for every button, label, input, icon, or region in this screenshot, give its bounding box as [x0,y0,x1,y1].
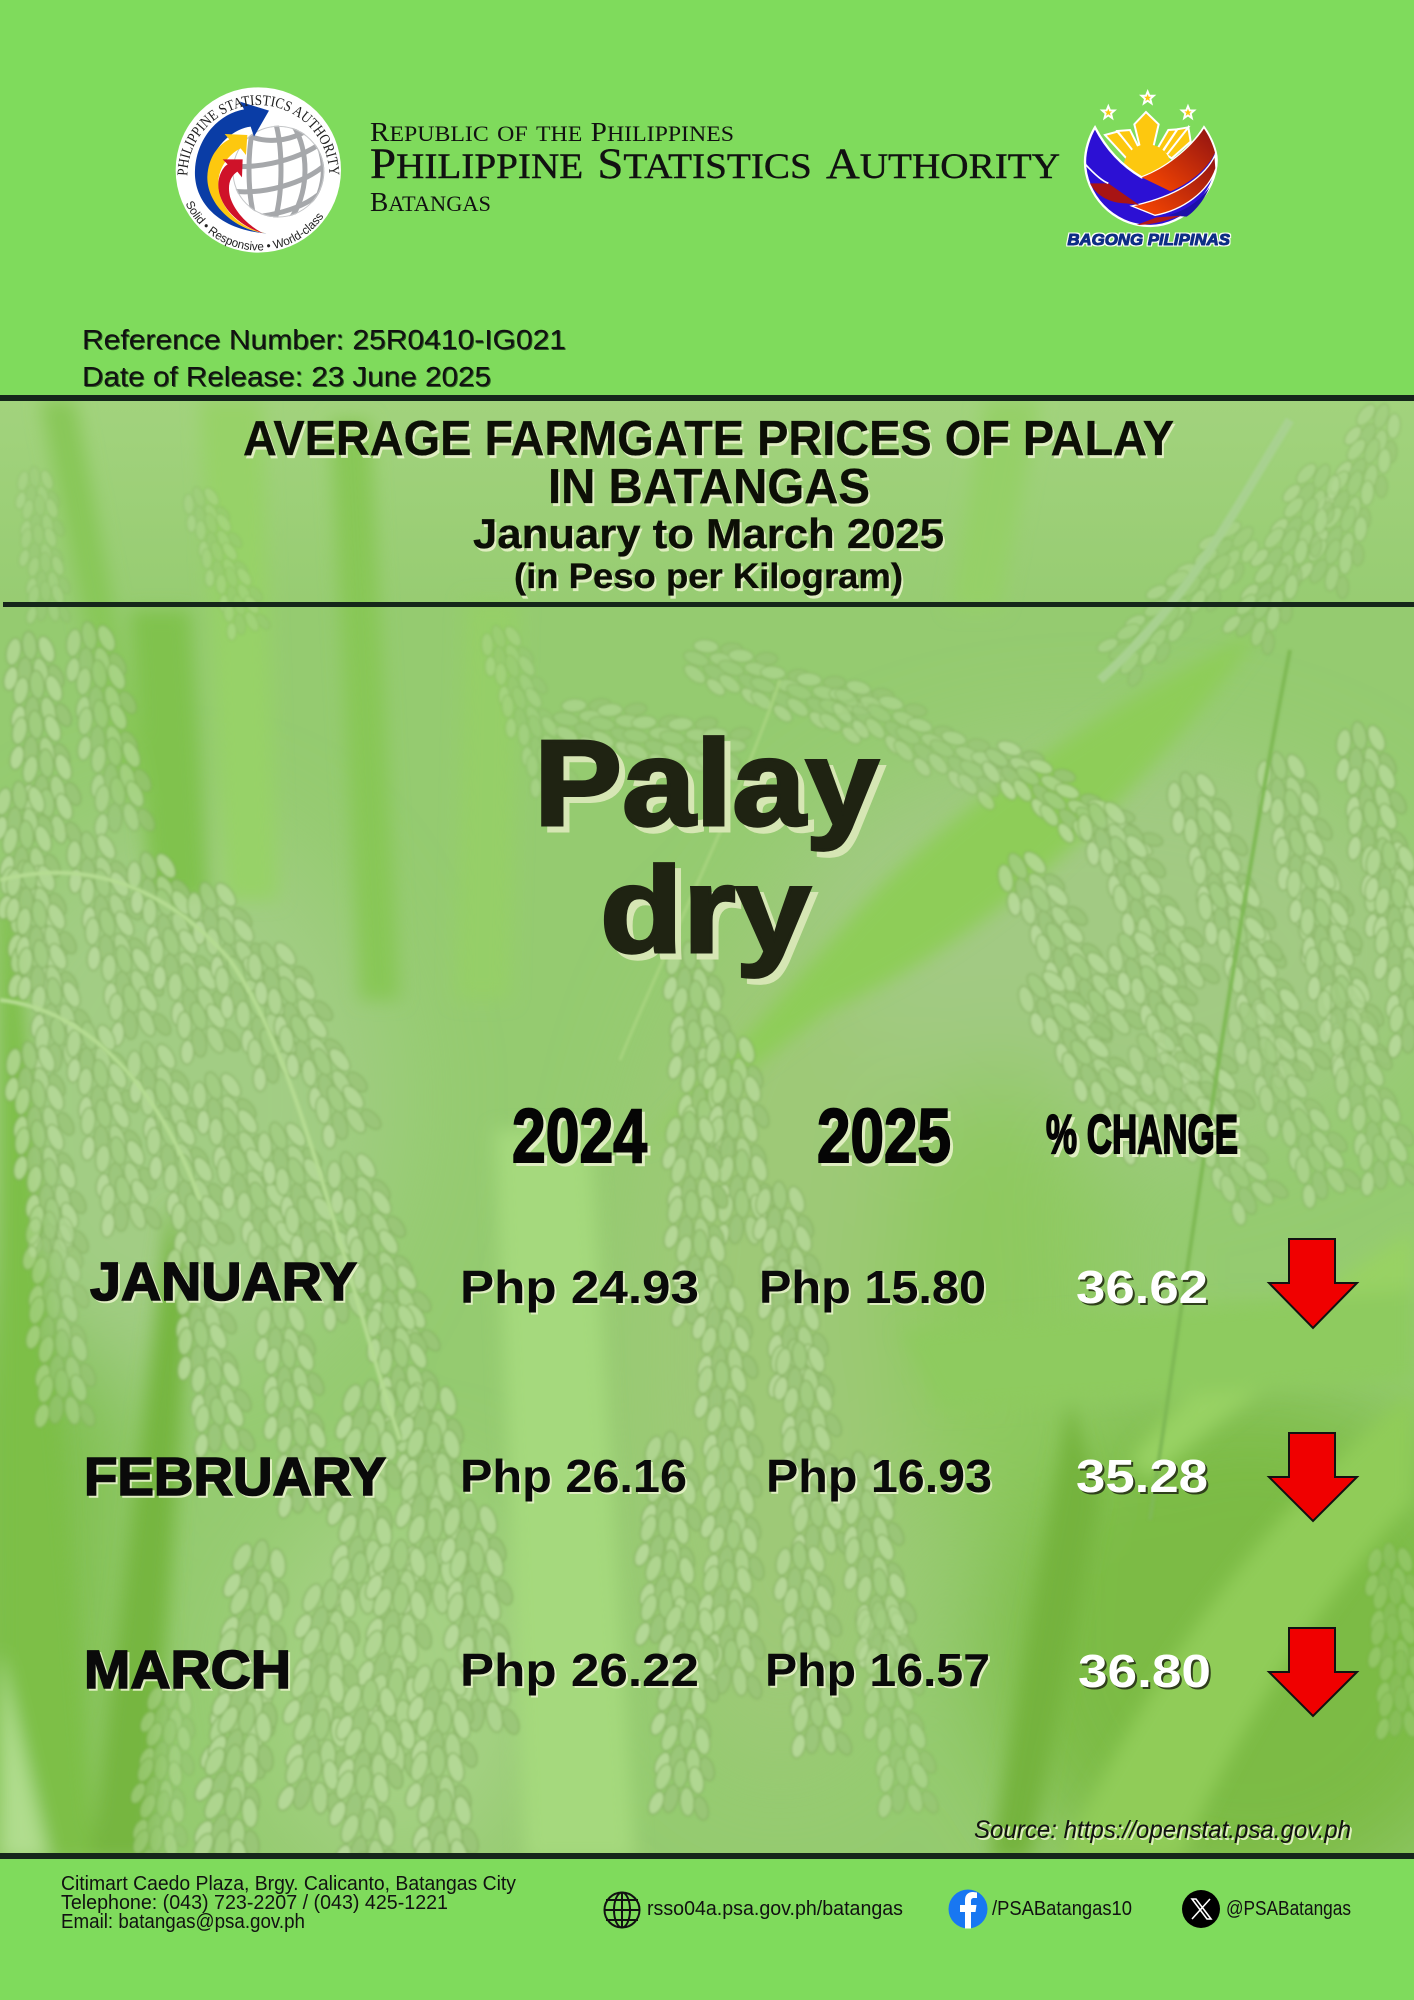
title: (in Peso per Kilogram) [514,557,903,596]
arrow: March down [1269,1628,1357,1716]
heading: commodity: Palay [534,715,879,851]
footer: address block: Telephone: (043) 723-2207 / (043) 425-1221 [61,1892,448,1914]
footer: website: rsso04a.psa.gov.ph/batangas [647,1898,903,1920]
title: January to March 2025 [473,510,944,557]
footer: address block: Email: batangas@psa.gov.ph [61,1911,305,1933]
table row: January: Php 15.80 [759,1261,986,1313]
title: AVERAGE FARMGATE PRICES OF PALAY [243,412,1174,466]
header text: agency name: Batangas [370,183,491,218]
footer: address block: Citimart Caedo Plaza, Brgy. Calicanto, Batangas City [61,1873,516,1895]
reference and release date: Reference Number: 25R0410-IG021 [82,324,566,355]
icon: Facebook [948,1890,988,1928]
table row: March: Php 16.57 [765,1644,990,1696]
arrow: February down [1269,1433,1357,1521]
table row: February: FEBRUARY [84,1447,386,1507]
icon: X [1182,1890,1220,1928]
background photo: rice field [0,393,1414,1921]
logo: Philippine Statistics Authority seal: PHILIPPINE STATISTICS AUTHORITY [178,95,340,176]
table row: March: 36.80 [1078,1645,1211,1697]
table row: March: Php 26.22 [460,1644,699,1696]
footer band [0,1859,1414,2000]
table row: January: 36.62 [1076,1261,1208,1313]
heading: commodity [534,715,879,978]
footer: X: @PSABatangas [1226,1898,1351,1920]
footer: Facebook [948,1890,1132,1928]
source note: Source: https://openstat.psa.gov.ph [974,1816,1351,1844]
table row: March [84,1628,1357,1716]
header text: agency name: Philippine Statistics Authority [370,133,1060,190]
reference and release date [82,324,566,392]
rule: top of photo [0,395,1414,401]
arrow: January down [1269,1239,1357,1328]
reference and release date: Date of Release: 23 June 2025 [82,361,491,392]
icon: globe [604,1892,640,1928]
footer: Facebook: /PSABatangas10 [992,1898,1132,1920]
logo: Bagong Pilipinas: BAGONG PILIPINAS [1067,232,1231,249]
table: column headers: % CHANGE [1046,1103,1238,1165]
footer: address block [61,1873,516,1933]
table row: January [90,1239,1357,1328]
table row: February: Php 16.93 [766,1450,992,1502]
table: column headers: 2024 [512,1094,647,1179]
logo: Philippine Statistics Authority seal [176,87,341,253]
table row: January: Php 24.93 [460,1261,699,1313]
footer: website [604,1892,903,1928]
table row: February: Php 26.16 [460,1450,687,1502]
heading: commodity: dry [600,842,811,978]
table row: February: 35.28 [1076,1450,1208,1502]
footer: X [1182,1890,1351,1928]
table row: February [84,1433,1357,1521]
rule: bottom of photo [0,1853,1414,1859]
table row: March: MARCH [84,1640,291,1700]
table row: January: JANUARY [90,1252,357,1312]
table: column headers [512,1094,1238,1179]
table: column headers: 2025 [817,1094,951,1179]
header text: agency name: Republic of the Philippines [370,113,734,148]
logo: Philippine Statistics Authority seal: Solid • Responsive • World-class [186,201,323,250]
title: IN BATANGAS [548,460,870,514]
header text: agency name [370,113,1060,218]
title [243,412,1174,596]
logo: Bagong Pilipinas [1067,92,1231,249]
rule: under title [3,602,1414,607]
